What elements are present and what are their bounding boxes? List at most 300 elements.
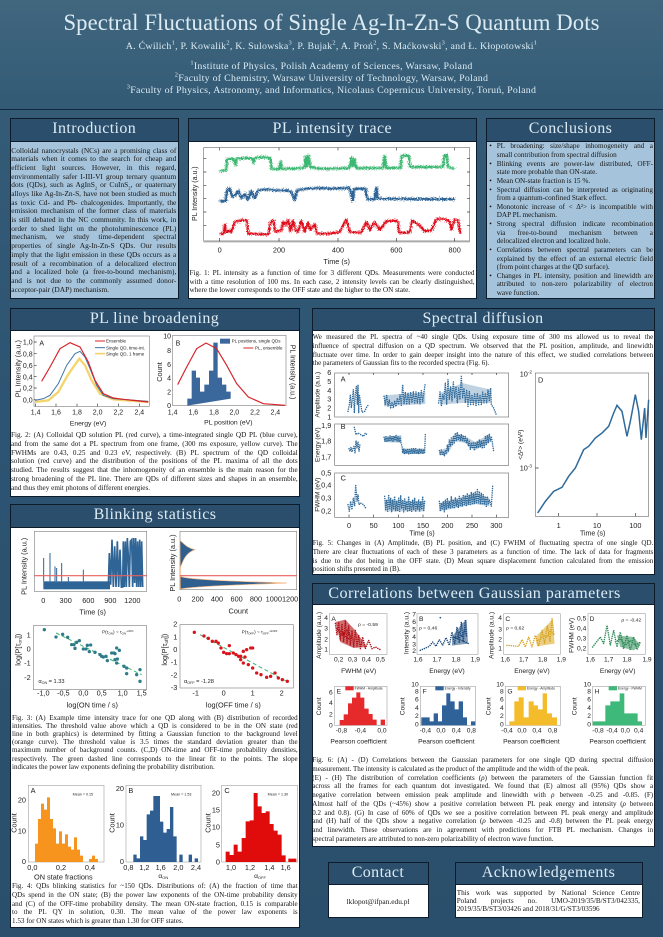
caption: figure 2: FWHMs are 0.43, 0.25 and 0.23 eV, respectively. (B) PL spectrum of the QD colloidal	[11, 449, 298, 457]
histogram F: energy-intensity Pearson coefficient: 8	[415, 688, 419, 695]
chart B: positions histogram: 2,0	[229, 409, 239, 416]
scatter A: amplitude vs FWHM: 4	[324, 615, 328, 622]
histogram H: energy-FWHM Pearson coefficient: -0,4	[606, 727, 618, 734]
histogram E: FWHM-amplitude Pearson coefficient: E	[336, 688, 341, 695]
chart D: OFF-time probability density: ])	[160, 634, 169, 638]
text: introduction: imply that the light emission in these QDs occurs as a	[11, 250, 176, 259]
chart A: spectra: 1,8	[72, 409, 82, 416]
histogram C: alpha OFF: 0	[216, 858, 220, 867]
chart: PL intensity traces: 0	[218, 245, 222, 254]
heading: conclusions: Conclusions	[529, 120, 612, 137]
caption: figure 5: Fig. 5: Changes in (A) Amplitude, (B) PL position, and (C) FWHM of fluctuating spectra of one single QD.	[313, 539, 653, 547]
caption: figure 5	[313, 539, 654, 573]
chart: spectral fluctuations A-D: 300	[490, 521, 502, 530]
caption: figure 6: 0.2 and 0.8). (G) In case of 60% of QDs we see a positive correlation between PL peak energy and amplitude	[312, 809, 653, 817]
chart B: positions histogram: 8	[167, 348, 171, 355]
text: conclusions list: state more probable than ON-state.	[497, 168, 597, 176]
panel: contact	[328, 862, 428, 918]
scatter B: intensity vs energy: ρ = 0,46	[419, 625, 437, 631]
chart B: positions histogram: 10	[163, 333, 171, 340]
chart B: positions histogram: PL position (eV)	[204, 419, 252, 426]
panel: conclusions	[486, 118, 655, 299]
scatter C: amplitude vs energy	[488, 611, 566, 675]
chart B: positions histogram: 2,4	[270, 409, 280, 416]
histogram H: energy-FWHM Pearson coefficient: 8	[587, 688, 591, 695]
chart A: intensity trace: 0	[41, 596, 45, 605]
chart D: OFF-time probability density: OFF	[187, 681, 195, 685]
chart C: ON-time probability density: ])	[14, 634, 23, 638]
chart A: spectra: 0,2	[23, 385, 33, 392]
histogram H: energy-FWHM Pearson coefficient: Pearson coefficient	[589, 738, 646, 745]
scatter C: amplitude vs energy: 1,9	[556, 656, 566, 663]
caption: figure 2: strong broadening of the PL line. There are QDs of different sizes and shapes in an ensemble,	[11, 475, 298, 483]
scatter C: amplitude vs energy: 4	[498, 615, 502, 622]
histogram G: energy-amplitude Pearson coefficient: 0,0	[517, 727, 527, 734]
chart: spectral fluctuations A-D: 1,9	[321, 421, 331, 430]
text: introduction: dots (QDs), such as AgInS2 or CuInS2, or quaternary	[11, 180, 176, 191]
histogram B: alpha ON: ON	[162, 875, 168, 880]
chart C: ON-time probability density: -2	[24, 673, 31, 682]
chart: PL intensity traces: PL Intensity (a.u.)	[192, 166, 199, 221]
chart B: intensity histogram: 800	[250, 595, 262, 604]
chart D: OFF-time probability density: -αOFF	[269, 629, 278, 633]
histogram H: energy-FWHM Pearson coefficient: 2	[587, 713, 591, 720]
caption: figure 6: across all the frames for each quantum dot investigated. We found that (E) almost all (95%) QDs show a	[312, 782, 653, 790]
histogram C: alpha OFF: 5	[216, 841, 220, 850]
scatter D: FWHM vs energy: 0,2	[577, 645, 586, 652]
chart D: OFF-time probability density: P(τ	[242, 630, 248, 635]
histogram C: alpha OFF: Mean = 1.30	[268, 793, 288, 797]
histogram F: energy-intensity Pearson coefficient: F	[422, 688, 426, 695]
chart: spectral fluctuations A-D: Time (s)	[409, 531, 434, 538]
scatter B: intensity vs energy: 5	[412, 626, 416, 633]
chart B: intensity histogram: 200	[192, 595, 204, 604]
chart: histograms of blinking statistics	[10, 784, 298, 882]
histogram A: ON state fractions: Count	[10, 814, 19, 833]
chart D: OFF-time probability density: log(P[τ	[160, 644, 169, 666]
chart B: intensity histogram: 400	[211, 595, 223, 604]
histogram G: energy-amplitude Pearson coefficient: Pearson coefficient	[503, 738, 559, 745]
chart C: ON-time probability density: -1	[24, 659, 31, 668]
scatter D: FWHM vs energy: 1,6	[585, 656, 595, 663]
scatter C: amplitude vs energy: 1,7	[519, 656, 528, 663]
chart B: positions histogram: PL positions, single QDs	[232, 338, 281, 343]
histogram F: energy-intensity Pearson coefficient: 2	[415, 713, 419, 720]
caption: figure 6: Almost half of the QDs (~45%) show a positive correlation between PL peak energy and intensity (ρ between	[312, 800, 653, 808]
chart: PL intensity traces: 400	[332, 245, 344, 254]
scatter A: amplitude vs FWHM: 0,3	[348, 656, 357, 663]
chart A: spectra: 1,0	[23, 339, 33, 346]
scatter D: FWHM vs energy: 1,9	[642, 656, 652, 663]
caption: figure 2: Fig. 2: (A) Colloidal QD solution PL (red curve), a time-integrated single QD PL (blue curve),	[11, 431, 298, 439]
text: introduction: materials when it comes to the search for cheap and	[11, 154, 176, 163]
panel: introduction	[10, 118, 179, 299]
chart C: ON-time probability density: 1,5	[137, 689, 147, 698]
chart: spectral fluctuations A-D: FWHM (eV)	[314, 478, 321, 512]
caption: figure 1	[190, 269, 474, 294]
caption: figure 6: measurement. The intensity is calculated as the product of the amplitude and the width of the peak.	[312, 765, 589, 773]
text: introduction	[11, 146, 176, 294]
chart D: OFF-time probability density: off	[164, 638, 170, 644]
histogram H: energy-FWHM Pearson coefficient: 0,0	[620, 727, 630, 734]
caption: figure 1: Fig. 1: PL intensity as a function of time for 3 different QDs. Measurements were conducted	[190, 269, 474, 277]
caption: figure 4: Fig. 4: QDs blinking statistics for ~150 QDs. Distributions of: (A) the fraction of time that	[12, 882, 298, 890]
histogram F: energy-intensity Pearson coefficient: 0	[415, 721, 419, 728]
histogram F: energy-intensity Pearson coefficient: 6	[415, 696, 419, 703]
chart D: OFF-time probability density: -3	[171, 683, 177, 692]
chart B: positions histogram: 2,2	[250, 409, 260, 416]
scatter D: FWHM vs energy: D	[589, 616, 594, 623]
text: acknowledgements: Poland projects no. UMO-2019/35/B/ST3/042335,	[457, 897, 640, 905]
scatter D: FWHM vs energy: 1,8	[622, 656, 632, 663]
histogram H: energy-FWHM Pearson coefficient: 4	[587, 705, 591, 712]
chart B: intensity histogram: Count	[229, 607, 248, 616]
scatter C: amplitude vs energy: 1	[498, 645, 502, 652]
chart: PL intensity traces: 800	[449, 245, 461, 254]
text: contact email: lklopot@ifpan.edu.pl	[346, 897, 410, 906]
caption: figure 3: line in both graphics) is determined by fitting a Gaussian function to the background level	[12, 730, 298, 738]
chart A: spectra: 0,0	[23, 397, 33, 404]
heading: blinking statistics	[10, 504, 300, 528]
chart C: ON-time probability density: 0	[27, 645, 31, 654]
scatter B: intensity vs energy: 1,7	[432, 656, 442, 663]
histogram C: alpha OFF: 20	[212, 789, 220, 798]
panel: acknowledgements	[454, 862, 642, 918]
text: spectral diffusion description	[313, 333, 654, 367]
histogram E: FWHM-amplitude Pearson coefficient: Pearson coefficient	[330, 738, 387, 745]
histogram A: ON state fractions: Mean = 0.15	[73, 793, 93, 797]
chart A: spectra: 2,0	[93, 409, 103, 416]
heading: acknowledgements	[454, 862, 642, 884]
chart C: ON-time probability density: -0,5	[57, 689, 70, 698]
chart: spectral fluctuations A-D: Energy (eV)	[314, 428, 321, 462]
chart A: spectra: 0,6	[23, 363, 33, 370]
panel: PL line broadening	[10, 308, 300, 497]
chart: spectral fluctuations A-D: 100	[629, 521, 641, 530]
caption: figure 2: and from the same dot a PL spectrum from one frame, (300 ms exposure, yellow curve). The	[11, 440, 298, 448]
chart D: OFF-time probability density: 0	[173, 645, 177, 654]
histogram F: energy-intensity Pearson coefficient: 0,8	[466, 727, 476, 734]
chart: spectral fluctuations A-D: 0,4	[321, 481, 331, 490]
histogram H: energy-FWHM Pearson coefficient: Energy - FWHM	[618, 686, 642, 690]
heading: correlations between Gaussian parameters	[312, 582, 654, 605]
chart: spectral fluctuations A-D: 100	[392, 521, 404, 530]
histogram C: alpha OFF: 15	[212, 806, 220, 815]
caption: figure 3: (orange curve). The threshold value is 3.5 times the standard deviation greater than the	[12, 738, 298, 746]
chart: spectral fluctuations A-D: 200	[441, 521, 453, 530]
text: acknowledgements: 2019/35/B/ST3/03426 and 2018/31/G/ST3/03596	[457, 905, 600, 913]
scatter D: FWHM vs energy: 0,3	[577, 635, 586, 642]
histogram C: alpha OFF: 1,4	[264, 863, 274, 872]
histogram E: FWHM-amplitude Pearson coefficient	[316, 686, 387, 745]
chart A: intensity trace	[20, 532, 147, 617]
caption: figure 5: position shifts presented in (B).	[313, 565, 401, 573]
scatter B: intensity vs energy: 4	[412, 634, 416, 641]
text: introduction: is still debated in the NC community. In this work, in	[11, 215, 176, 224]
chart B: positions histogram: 2	[167, 389, 171, 396]
heading: contact: Contact	[352, 864, 404, 881]
chart A: spectra: 2,2	[113, 409, 123, 416]
bullet markers	[489, 142, 492, 280]
caption: figure 6: and (H) half of the QDs show a negative correlation (ρ between -0.25 and -0.8) between the PL peak energy	[312, 817, 653, 825]
caption: figure 1: where the lower corresponds to the OFF state and the higher to the ON state.	[190, 286, 410, 294]
scatter B: intensity vs energy	[403, 611, 480, 675]
chart: spectral fluctuations A-D: Time (s)	[580, 531, 605, 538]
scatter D: FWHM vs energy: 0,5	[577, 615, 586, 622]
histogram F: energy-intensity Pearson coefficient: Count	[399, 697, 406, 715]
text: conclusions list: Mean ON-state fraction is 15 %.	[497, 177, 590, 185]
text: spectral diffusion description: the parameters of Gaussian fits to the recorded spectra (Fig. 6).	[313, 359, 489, 367]
panel: correlations between Gaussian parameters	[312, 582, 654, 847]
chart A: spectra: Single QD, time-int.	[106, 345, 145, 350]
histogram E: FWHM-amplitude Pearson coefficient: 2	[329, 711, 333, 718]
heading: PL intensity trace: PL intensity trace	[273, 120, 392, 137]
chart: spectral fluctuations A-D: 1,7	[321, 453, 331, 462]
histogram B: alpha ON: α	[158, 873, 162, 880]
heading: blinking statistics: Blinking statistics	[94, 506, 216, 523]
chart A: spectra: PL Intensity (a.u.)	[14, 340, 23, 397]
histogram C: alpha OFF: 1,2	[245, 863, 255, 872]
histogram A: ON state fractions: ON state fractions	[34, 873, 93, 882]
chart C: ON-time probability density	[14, 626, 147, 710]
histogram A: ON state fractions: 20	[18, 796, 26, 805]
scatter C: amplitude vs energy: C	[505, 616, 510, 623]
bullet markers: •	[489, 160, 492, 168]
caption: figure 1: with a time resolution of 100 ms. In each case, 2 intensity levels can be clearly distinguished,	[190, 278, 474, 286]
scatter B: intensity vs energy: 2	[412, 648, 416, 655]
chart D: OFF-time probability density: α	[184, 679, 187, 685]
chart D: OFF-time probability density: 0	[222, 689, 226, 698]
histogram F: energy-intensity Pearson coefficient: -0,4	[419, 727, 431, 734]
text: introduction: properties of single Ag-In-Zn-S QDs. Our results	[11, 241, 176, 250]
text: conclusions list: attributed to non-zero polarizability of electron	[497, 280, 653, 288]
histogram B: alpha ON: 0	[120, 857, 124, 866]
histogram F: energy-intensity Pearson coefficient	[399, 681, 476, 745]
bullet markers: •	[489, 246, 492, 254]
scatter A: amplitude vs FWHM: 3	[324, 625, 328, 632]
affiliations: 3Faculty of Physics, Astronomy, and Informatics, Nicolaus Copernicus University, Toruń, Poland	[127, 84, 536, 96]
text: introduction: and is not due to the commonly assumed donor-	[11, 276, 176, 285]
chart C: ON-time probability density: -αON	[126, 629, 133, 633]
chart B: positions histogram: B	[176, 340, 181, 347]
scatter A: amplitude vs FWHM: 0,4	[361, 656, 371, 663]
poster header	[0, 0, 663, 110]
scatter A: amplitude vs FWHM: 0,5	[375, 656, 385, 663]
scatter D: FWHM vs energy: 0,4	[577, 625, 586, 632]
chart A: intensity trace: 900	[104, 596, 116, 605]
chart A: intensity trace: Time (s)	[79, 608, 106, 617]
chart A: spectra: 0,8	[23, 351, 33, 358]
chart: PL intensity traces: 600	[391, 245, 403, 254]
text: conclusions list	[496, 142, 653, 297]
chart B: positions histogram: 0	[167, 403, 171, 410]
chart: spectral fluctuations A-D	[314, 368, 650, 538]
chart: spectral fluctuations A-D: 0,2	[321, 507, 331, 516]
text: introduction: emission mechanism of the former class of materials	[11, 206, 176, 215]
caption: figure 6: and linewidth. These observations are in agreement with predictions for FTB PL mechanism. Changes in	[312, 826, 653, 834]
chart D: OFF-time probability density	[160, 620, 293, 710]
caption: figure 4: QDs spend in the ON state; (B) the power law exponents of the ON-time probability density	[12, 891, 298, 899]
caption: figure 2: and thus they emit photons of different energies.	[11, 484, 150, 492]
caption: figure 5: There are clear fluctuations of each of these 3 parameters as a function of time. The lack of data for fragments	[313, 548, 653, 556]
histogram C: alpha OFF: 1,0	[226, 863, 236, 872]
histogram H: energy-FWHM Pearson coefficient: H	[594, 688, 599, 695]
chart A: spectra: 1,6	[51, 409, 61, 416]
histogram A: ON state fractions: 0,0	[27, 863, 37, 872]
chart D: OFF-time probability density: OFF	[263, 632, 269, 636]
scatter D: FWHM vs energy: ρ = -0,42	[621, 617, 641, 623]
heading: conclusions	[486, 118, 655, 142]
text: introduction: mechanism, we study time-dependent spectral	[11, 232, 176, 241]
histogram G: energy-amplitude Pearson coefficient: 4	[500, 705, 504, 712]
chart A: intensity trace: 600	[82, 596, 94, 605]
affiliations	[127, 60, 536, 96]
text: introduction: order to shed light on the photoluminescence (PL)	[11, 224, 176, 233]
bullet markers: •	[489, 186, 492, 194]
histogram E: FWHM-amplitude Pearson coefficient: 0	[329, 722, 333, 729]
histogram E: FWHM-amplitude Pearson coefficient: 4	[329, 700, 333, 707]
series A: amplitude	[348, 377, 496, 414]
panel: blinking statistics	[10, 504, 300, 928]
heading: spectral diffusion: Spectral diffusion	[422, 310, 544, 327]
caption: figure 6: spectral parameters are attributed to non-zero polarizability of electron wave function.	[312, 835, 554, 843]
text: introduction: environmentally safer I-III-VI group ternary quantum	[11, 172, 176, 181]
text: acknowledgements	[456, 888, 640, 913]
chart D: OFF-time probability density: 1	[251, 689, 255, 698]
chart: spectral fluctuations A-D: 3	[327, 395, 331, 404]
scatter B: intensity vs energy: 7	[412, 611, 416, 618]
chart B: positions histogram: 1,6	[188, 409, 198, 416]
scatter C: amplitude vs energy: 1,8	[538, 656, 547, 663]
chart: spectral fluctuations A-D: 10	[519, 464, 528, 473]
chart: spectral fluctuations A-D: 250	[466, 521, 478, 530]
histogram C: alpha OFF: Count	[204, 814, 213, 833]
histogram E: FWHM-amplitude Pearson coefficient: Count	[316, 697, 323, 715]
histogram E: FWHM-amplitude Pearson coefficient: -0,4	[354, 727, 366, 734]
chart B: positions histogram: PL Intensity (a.u.)	[288, 344, 295, 399]
scatter A: amplitude vs FWHM: 1	[324, 646, 328, 653]
histogram E: FWHM-amplitude Pearson coefficient: FWHM - Amplitude	[354, 686, 382, 690]
chart: spectral fluctuations A-D: <Δ²> (eV²)	[517, 430, 524, 460]
chart B: positions histogram: 6	[167, 362, 171, 369]
scatter B: intensity vs energy: Energy (eV)	[429, 668, 464, 675]
text: conclusions list: wave function.	[497, 289, 539, 297]
scatter A: amplitude vs FWHM: 0,2	[334, 656, 343, 663]
scatter A: amplitude vs FWHM: Amplitude (a.u.)	[316, 611, 323, 658]
chart: spectra A and histogram B	[14, 333, 296, 427]
chart: blinking traces and probability densities	[14, 531, 298, 710]
heading: PL line broadening	[10, 308, 300, 331]
chart B: positions histogram: PL, ensemble	[255, 345, 283, 350]
histogram F: energy-intensity Pearson coefficient: 4	[415, 705, 419, 712]
text: introduction: result of a recombination of a delocalized electron	[11, 259, 176, 268]
chart: spectral fluctuations A-D: C	[340, 474, 346, 483]
histogram F: energy-intensity Pearson coefficient: 0,4	[451, 727, 461, 734]
text: spectral diffusion description: influence of spectral diffusion on a QD spectrum. We observed that the PL position, amplitude, and linewidth	[313, 342, 653, 350]
text: conclusions list: via free-to-bound mechanism between a Correlations between spectral parameters can be	[497, 229, 653, 254]
heading: introduction	[10, 118, 179, 142]
chart B: positions histogram: 1,4	[168, 409, 178, 416]
histogram E: FWHM-amplitude Pearson coefficient: -0,8	[335, 727, 347, 734]
chart D: OFF-time probability density: ) ~ τ	[254, 630, 263, 635]
histogram B: alpha ON: 0,8	[123, 863, 133, 872]
histogram E: FWHM-amplitude Pearson coefficient: 6	[329, 689, 333, 696]
chart B: positions histogram: Count	[155, 362, 164, 381]
text: conclusions list: small contribution from spectral diffusion	[497, 151, 617, 159]
chart: PL intensity traces: Time (s)	[324, 257, 350, 266]
histogram B: alpha ON: Mean = 1.53	[171, 793, 191, 797]
chart B: positions histogram: 1,8	[209, 409, 219, 416]
histogram C: alpha OFF: α	[254, 873, 258, 880]
chart: spectral fluctuations A-D: 4	[327, 386, 331, 395]
chart C: ON-time probability density: -1,0	[37, 689, 50, 698]
chart B: positions histogram: 4	[167, 375, 171, 382]
histogram F: energy-intensity Pearson coefficient: 0,0	[436, 727, 446, 734]
scatter C: amplitude vs energy: 3	[498, 626, 502, 633]
scatter B: intensity vs energy: 1,8	[451, 656, 461, 663]
histogram F: energy-intensity Pearson coefficient: 10	[411, 681, 419, 688]
chart: spectral fluctuations A-D: -3	[528, 464, 532, 469]
histogram F: energy-intensity Pearson coefficient: Energy - Intensity	[444, 686, 471, 690]
text: spectral diffusion description: fluctuate over time. In order to gain deeper insight into the nature of this effect, we studied correlations between	[313, 351, 653, 359]
histogram G: energy-amplitude Pearson coefficient: 0,8	[548, 727, 557, 734]
chart: correlation scatter plots and histograms	[316, 611, 652, 745]
chart D: OFF-time probability density: -1	[171, 658, 177, 667]
chart C: ON-time probability density: 0,5	[97, 689, 107, 698]
bullet markers: •	[489, 220, 492, 228]
text: introduction: Colloidal nanocrystals (NCs) are a promising class of	[11, 146, 176, 155]
scatter A: amplitude vs FWHM: FWHM (eV)	[341, 668, 376, 675]
scatter B: intensity vs energy: Intensity (a.u.)	[403, 612, 410, 654]
scatter C: amplitude vs energy: 2	[498, 636, 502, 643]
scatter A: amplitude vs FWHM: 2	[324, 636, 328, 643]
chart A: spectra: Ensemble	[106, 338, 127, 343]
chart: spectral fluctuations A-D: 10	[593, 521, 601, 530]
histogram G: energy-amplitude Pearson coefficient: 0	[500, 721, 504, 728]
histogram B: alpha ON: 10	[116, 821, 124, 830]
histogram G: energy-amplitude Pearson coefficient: 0,4	[532, 727, 542, 734]
caption: figure 3: maximum number of background counts. (C,D) ON-time and OFF-time probability densities,	[12, 746, 298, 754]
caption: figure 4: to the PL QY in solution, 0.30. The mean value of the power law exponents is	[12, 908, 298, 916]
heading: correlations between Gaussian parameters: Correlations between Gaussian parameters	[328, 584, 621, 602]
chart A: spectra: 1,4	[31, 409, 41, 416]
histogram A: ON state fractions: 0,4	[85, 863, 95, 872]
chart: spectral fluctuations A-D: 6	[327, 368, 331, 377]
histogram A: ON state fractions: A	[31, 786, 36, 795]
caption: figure 3: respectively. The green dashed line corresponds to the linear fit to the points. The slope	[12, 755, 298, 763]
heading: spectral diffusion	[312, 308, 654, 331]
scatter B: intensity vs energy: 1,6	[413, 656, 423, 663]
scatter D: FWHM vs energy: FWHM (eV)	[568, 617, 575, 653]
chart C: ON-time probability density: ON	[108, 632, 113, 636]
heading: acknowledgements: Acknowledgements	[482, 864, 615, 881]
histogram G: energy-amplitude Pearson coefficient: G	[507, 688, 512, 695]
histogram B: alpha ON: 1,6	[156, 863, 166, 872]
histogram C: alpha OFF	[204, 786, 298, 880]
histogram A: ON state fractions	[10, 786, 104, 882]
chart: spectral fluctuations A-D: 1	[327, 413, 331, 422]
text: acknowledgements: This work was supported by National Science Centre	[457, 888, 640, 896]
chart D: OFF-time probability density: 2	[173, 620, 177, 629]
scatter C: amplitude vs energy: Energy (eV)	[514, 668, 549, 675]
chart: spectral fluctuations A-D: B	[340, 422, 345, 431]
chart A: intensity trace: 300	[60, 596, 72, 605]
chart D: OFF-time probability density: = -1.28	[195, 679, 214, 685]
caption: figure 6: Fig. 6: (A) - (D) Correlations between the Gaussian parameters for one single QD during spectral diffusion (E) - (H) The distribution of correlation coefficients (ρ) between the parameters of the Gaussian function fit	[312, 756, 653, 782]
histogram H: energy-FWHM Pearson coefficient: 10	[583, 681, 591, 688]
scatter D: FWHM vs energy: Energy (eV)	[600, 668, 635, 675]
heading: PL line broadening: PL line broadening	[90, 310, 219, 327]
